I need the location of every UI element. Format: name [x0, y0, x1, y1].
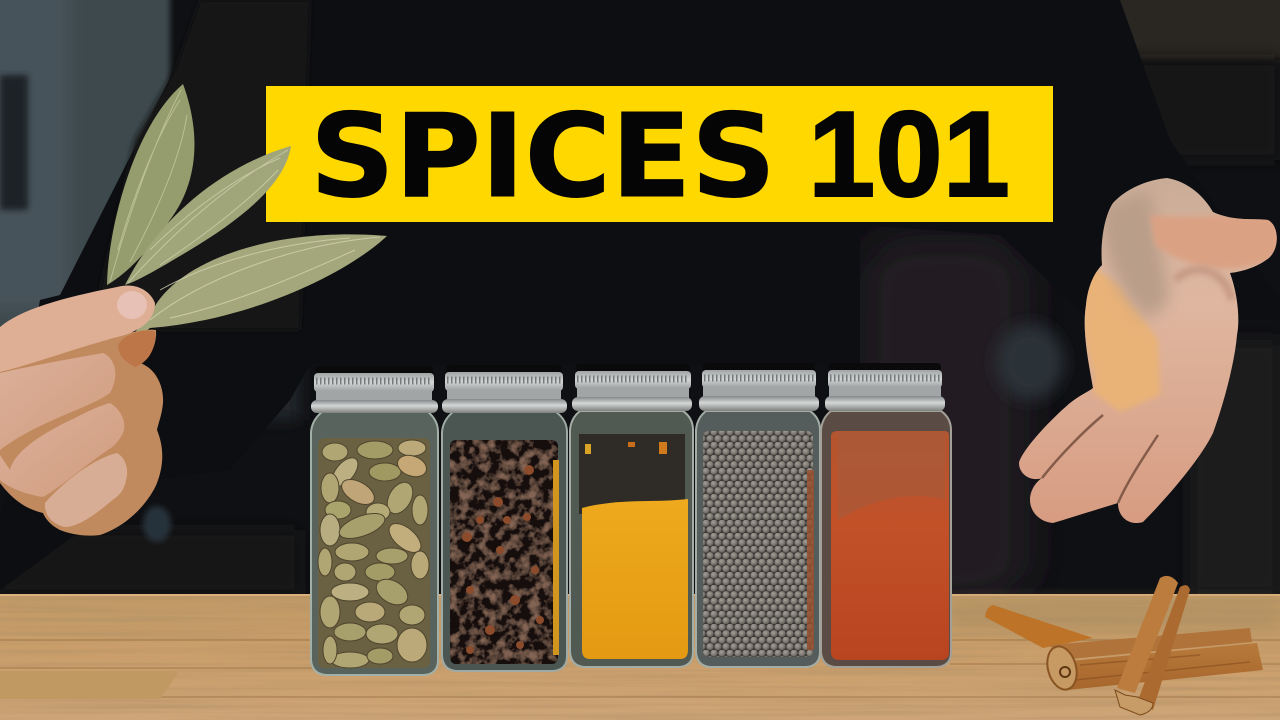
right open hand: [1019, 178, 1280, 523]
glass body: [696, 411, 820, 667]
leaf: upright: [107, 84, 194, 285]
glass body: [311, 412, 438, 675]
wooden table: [0, 594, 1280, 720]
left hand holding the leaves: [0, 285, 163, 536]
ring finger: [0, 403, 124, 497]
turmeric powder: [582, 499, 688, 659]
clove heads: [462, 465, 544, 654]
cardamom pods: [318, 440, 430, 668]
glass body: [442, 412, 567, 671]
lid: [699, 363, 819, 411]
jar 1: cardamom: [311, 366, 438, 675]
jar 2: cloves: [442, 365, 567, 671]
title word: SPICES: SPICES: [310, 90, 776, 224]
bay leaves: [107, 84, 387, 346]
leaf: lower: [122, 234, 387, 346]
upright stick A: [1117, 576, 1178, 693]
jar 3: turmeric: [570, 364, 693, 667]
cinnamon sticks: [985, 576, 1263, 715]
glass body: [821, 411, 951, 667]
thumbnail: [117, 291, 147, 319]
front stick: [1060, 643, 1263, 690]
lid: [572, 364, 692, 411]
rear stick: [1050, 628, 1252, 660]
lid: [825, 363, 945, 411]
hand silhouette: [1019, 178, 1277, 523]
lid: [311, 366, 438, 413]
glass body: [570, 411, 693, 667]
finger gaps: [1042, 415, 1158, 503]
jar 5: paprika: [821, 363, 951, 667]
title number: 101: 101: [808, 86, 1010, 222]
lid: [442, 365, 567, 413]
stick base curl: [1115, 690, 1153, 715]
middle finger: [0, 353, 115, 450]
jar 4: mustard seeds: [696, 363, 820, 667]
thin orange stick: [985, 605, 1093, 648]
palm and thumb: [0, 330, 163, 536]
hand shading: [1084, 190, 1280, 412]
leaf: middle: [125, 146, 291, 285]
title banner: [266, 86, 1053, 224]
pinky finger: [45, 453, 127, 527]
paprika powder: [831, 431, 949, 660]
upright stick B: [1137, 585, 1190, 710]
index finger: [0, 285, 155, 372]
curled stick end: [1043, 643, 1081, 693]
